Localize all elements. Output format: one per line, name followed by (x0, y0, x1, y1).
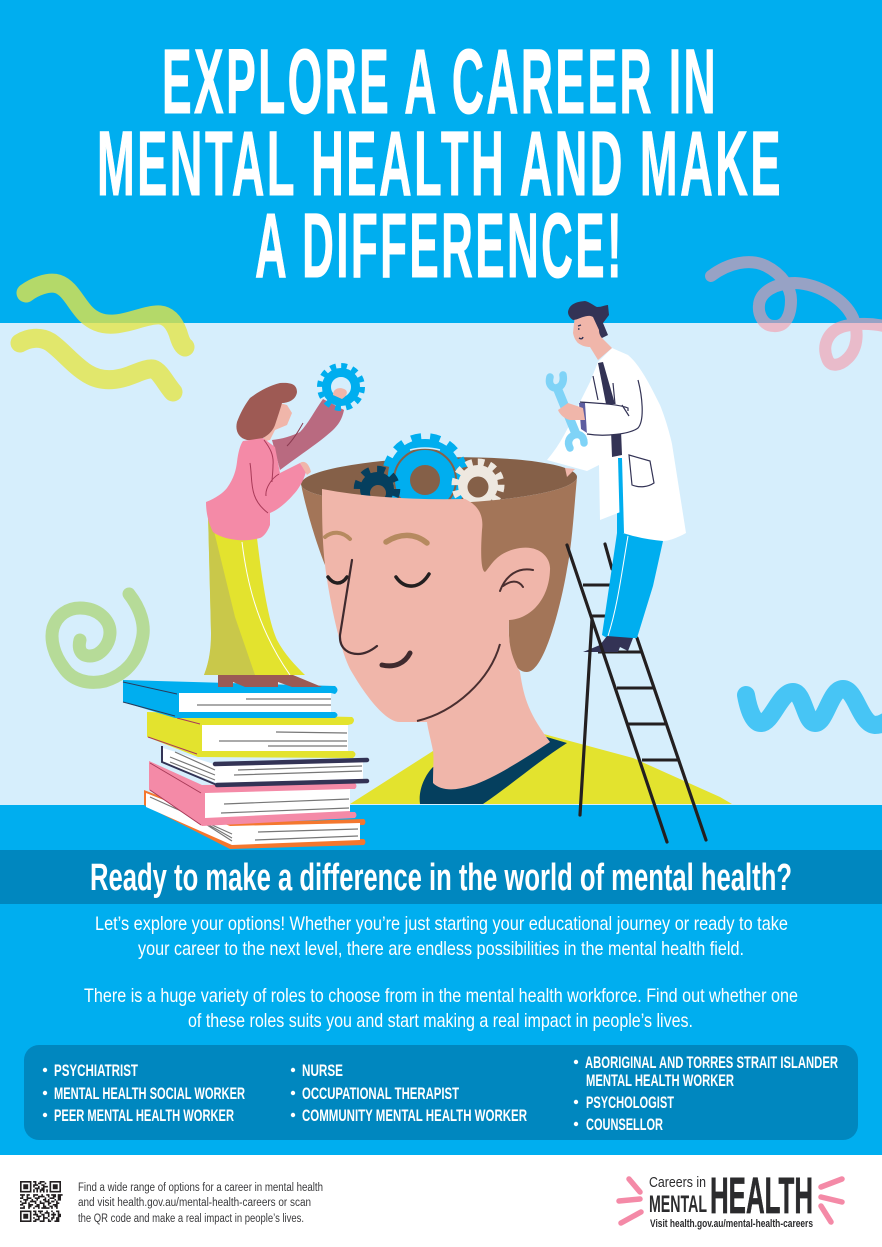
jacket folds (250, 440, 279, 513)
hair (236, 383, 297, 440)
blue book (123, 680, 338, 718)
shoes (218, 675, 322, 687)
face and neck (322, 489, 550, 789)
roles column 2 (291, 1061, 527, 1125)
shirt collar (420, 735, 567, 804)
logo: Careers in Mental Health (619, 1167, 842, 1230)
footer text: the QR code and make a real impact in people’s lives. (78, 1213, 304, 1225)
footer text: and visit health.gov.au/mental-health-careers or scan (78, 1197, 311, 1209)
gear held up (320, 366, 362, 408)
hand on head rim (300, 462, 311, 475)
tie (598, 362, 622, 457)
logo: Careers in Mental Health: MENTAL (649, 1191, 707, 1218)
skirt (204, 513, 305, 675)
decorative squiggle: green spiral (52, 594, 143, 682)
shoes (583, 636, 633, 652)
inner sleeve (579, 402, 587, 433)
illustration: ladder (583, 544, 706, 840)
logo: Careers in Mental Health: Careers in (649, 1174, 706, 1191)
roles column 2: NURSE (302, 1061, 343, 1080)
roles column 1: MENTAL HEALTH SOCIAL WORKER (54, 1084, 245, 1103)
logo rays (619, 1179, 842, 1223)
ear, eye and smile (578, 325, 583, 339)
orange book (144, 790, 366, 849)
nose (340, 560, 377, 654)
roles column 3: MENTAL HEALTH WORKER (586, 1071, 734, 1090)
QR code (20, 1182, 63, 1221)
mouth (382, 653, 410, 666)
wrench (549, 375, 584, 448)
trousers (602, 458, 663, 638)
roles column 3 (574, 1053, 838, 1134)
illustration: stack of books (123, 680, 367, 849)
hand on wrench (558, 403, 585, 420)
eyebrows (325, 533, 350, 539)
illustration: large head with gears (301, 436, 732, 804)
open head rim (301, 457, 577, 504)
illustration background panel (0, 323, 882, 805)
pink book (149, 761, 356, 826)
subheading band (0, 850, 882, 904)
roles column 2: OCCUPATIONAL THERAPIST (302, 1084, 459, 1103)
roles panel (24, 1045, 858, 1140)
decorative squiggle: blue wave (746, 689, 882, 725)
intro text (84, 913, 798, 1032)
hand at rim (565, 468, 575, 477)
gears inside head (357, 436, 501, 516)
neck and face (262, 403, 292, 442)
ear detail (500, 569, 533, 591)
face and neck (573, 314, 612, 360)
closed eyes (328, 577, 347, 583)
lab coat (547, 348, 686, 541)
footer text: Find a wide range of options for a career in mental health (78, 1182, 323, 1194)
ladder front rails and back leg (567, 545, 667, 842)
raised arm (272, 399, 344, 470)
title (97, 31, 783, 297)
skirt shadow (204, 513, 255, 675)
intro text: of these roles suits you and start making a real impact in people’s lives. (188, 1010, 693, 1032)
coat pocket (629, 455, 654, 487)
roles column 3: COUNSELLOR (586, 1115, 663, 1134)
illustration: doctor with wrench (547, 301, 686, 842)
roles column 2: COMMUNITY MENTAL HEALTH WORKER (302, 1106, 527, 1125)
logo: Careers in Mental Health: Visit health.gov.au/mental-health-careers (650, 1218, 813, 1230)
navy book (162, 746, 367, 785)
yellow book (147, 712, 356, 758)
coat sleeve (585, 380, 643, 435)
decorative squiggle: pink loops (711, 262, 882, 365)
illustration: woman on books holding a gear (204, 366, 362, 687)
coat lines (580, 376, 642, 435)
hair (568, 301, 609, 338)
roles column 3: PSYCHOLOGIST (586, 1093, 674, 1112)
man's shirt (350, 733, 732, 804)
roles column 1: PEER MENTAL HEALTH WORKER (54, 1106, 234, 1125)
jaw line (417, 644, 500, 721)
roles column 1: PSYCHIATRIST (54, 1061, 138, 1080)
footer text (78, 1182, 323, 1225)
roles column 1 (43, 1061, 245, 1125)
intro text: your career to the next level, there are endless possibilities in the mental health field. (138, 938, 744, 960)
decorative squiggle: yellow-green waves (20, 283, 185, 392)
hair (301, 477, 577, 672)
pink jacket (206, 438, 306, 540)
